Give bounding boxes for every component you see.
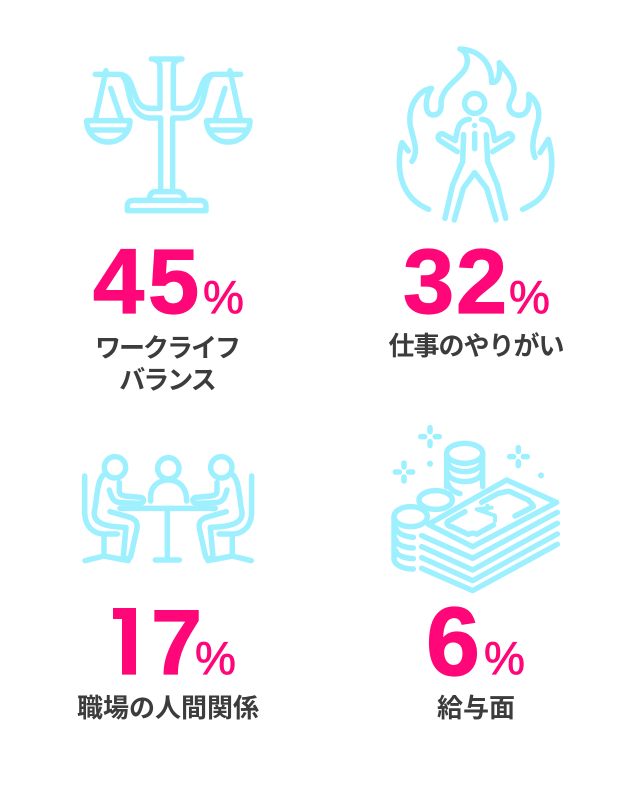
icon: balance scale	[87, 59, 250, 211]
panel: salary	[394, 428, 557, 723]
number: 17%: 1	[96, 592, 147, 694]
number: 45%: %	[203, 271, 244, 323]
number: 6%	[426, 587, 525, 696]
label: ワークライフバランス: ワークライフ	[95, 333, 239, 363]
number: 45%: 45	[93, 231, 199, 333]
icon: coins and banknotes	[394, 428, 557, 591]
number: 17%	[113, 608, 235, 675]
number: 6%: %	[484, 632, 525, 684]
panel: job satisfaction	[388, 49, 564, 361]
number: 17%: %	[195, 632, 236, 684]
label: ワークライフバランス: バランス	[119, 365, 215, 395]
label: ワークライフバランス	[95, 333, 239, 395]
icon: person in flames	[399, 49, 552, 220]
number: 32%: %	[509, 271, 550, 323]
label: 職場の人間関係: 職場の人間関係	[77, 693, 259, 723]
panel: workplace relationships	[77, 457, 259, 723]
icon: people at a table	[85, 457, 252, 561]
label: 給与面: 給与面	[437, 693, 515, 723]
number: 32%: 32	[403, 231, 507, 333]
label: 仕事のやりがい: 仕事のやりがい	[388, 331, 564, 361]
panel: work-life balance	[87, 59, 250, 395]
number: 17%: 7	[151, 592, 202, 694]
number: 6%: 6	[426, 587, 480, 696]
